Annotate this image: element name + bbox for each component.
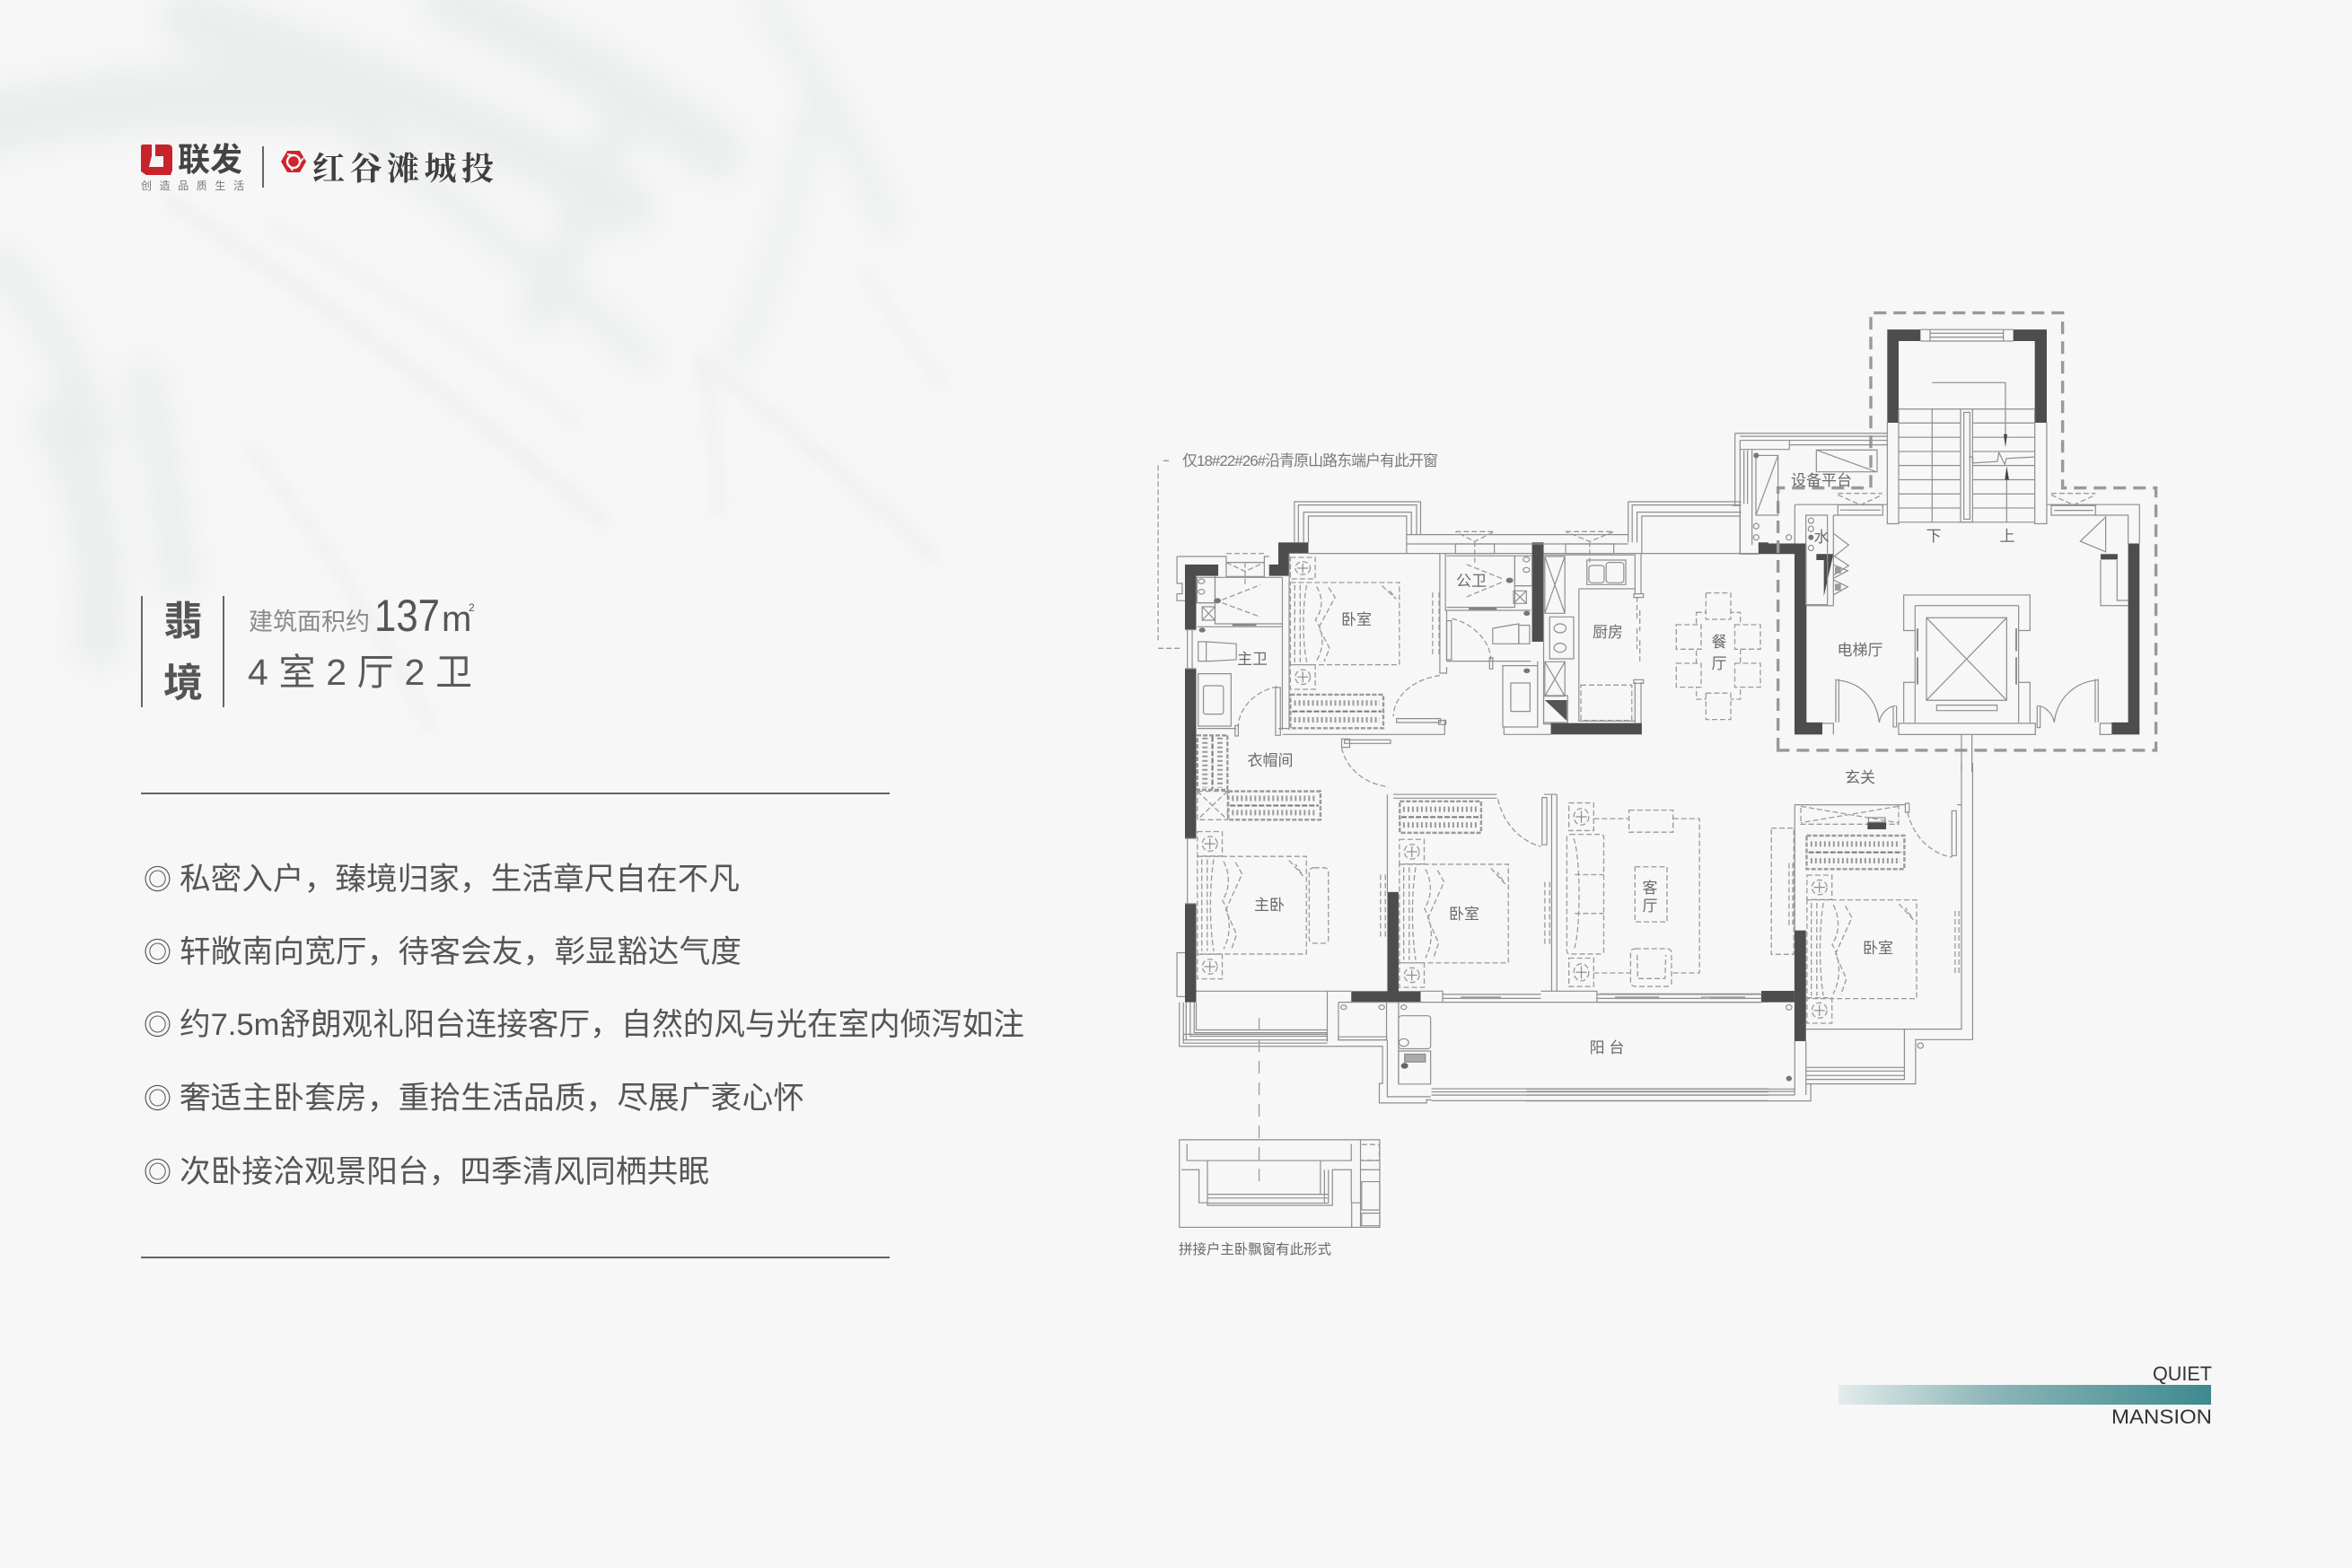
plan: north-west rooms: [1158, 460, 1768, 835]
room labels: 衣帽间: [1248, 752, 1293, 769]
feature 1: 私密入户，臻境归家，生活章尺自在不凡: [180, 863, 740, 897]
logo: Lianfa symbol: [141, 145, 172, 175]
brand mark: quiet mansion: [1839, 1362, 2212, 1428]
plan note: bay window: 拼接户主卧飘窗有此形式: [1179, 1241, 1331, 1257]
area unit superscript: 2: [469, 601, 475, 614]
room labels: 玄关: [1845, 769, 1875, 786]
room labels: 电梯厅: [1837, 642, 1883, 659]
feature 3: 约7.5m舒朗观礼阳台连接客厅，自然的风与光在室内倾泻如注: [180, 1008, 1024, 1042]
plan: south rooms: [1177, 763, 1768, 1227]
brand word: mansion: MANSION: [2111, 1406, 2212, 1428]
logo: tagline: 创造品质生活: [141, 180, 244, 192]
room labels: 卧室: [1863, 940, 1893, 957]
room labels: 上: [2000, 528, 2014, 545]
room labels: 主卫: [1237, 651, 1268, 668]
area unit: m: [442, 600, 471, 639]
heading: product name: 翡: [163, 600, 203, 644]
room labels: 主卧: [1254, 897, 1285, 914]
logo: Honggutan hexagon: [281, 151, 306, 172]
room labels: 下: [1926, 528, 1941, 545]
room labels: 卧室: [1449, 906, 1479, 923]
brand word: quiet: QUIET: [2153, 1362, 2212, 1385]
floor plan: [1158, 313, 2156, 1257]
room labels: 厨房: [1593, 624, 1623, 641]
room labels: 公卫: [1456, 573, 1487, 590]
heading block: [141, 591, 475, 707]
heading: product name: [163, 600, 203, 705]
logo: Lianfa wordmark: 联发: [178, 141, 242, 178]
room labels: 设备平台: [1791, 472, 1852, 489]
room labels: 阳 台: [1590, 1039, 1624, 1056]
logo group: [141, 141, 494, 192]
palm leaf shadow: [0, 0, 943, 727]
plan: east bedroom: [1526, 763, 1972, 1101]
heading rule right: [223, 596, 224, 707]
room labels: 厅: [1643, 898, 1657, 915]
top rule: [141, 793, 890, 794]
plan note: window: 仅18#22#26#沿青原山路东端户有此开窗: [1182, 452, 1438, 469]
heading rule left: [141, 596, 143, 707]
feature 5: ◎: [144, 1157, 171, 1188]
heading: product name: 境: [163, 661, 203, 705]
room labels: 餐: [1711, 634, 1727, 651]
feature 2: ◎: [144, 937, 171, 968]
gradient bar: [1839, 1385, 2211, 1405]
feature 2: 轩敞南向宽厅，待客会友，彰显豁达气度: [180, 935, 742, 969]
feature 4: ◎: [144, 1083, 171, 1115]
feature list: [144, 863, 1024, 1189]
feature 3: ◎: [144, 1010, 171, 1041]
logo: Honggutan wordmark: 红谷滩城投: [312, 144, 494, 189]
area label: 建筑面积约: [249, 609, 370, 635]
room labels: 卧室: [1341, 611, 1372, 628]
feature 4: 奢适主卧套房，重拾生活品质，尽展广袤心怀: [180, 1082, 804, 1116]
room layout: 4 室 2 厅 2 卫: [248, 652, 472, 693]
room labels: 客: [1643, 880, 1657, 897]
feature 1: ◎: [144, 864, 171, 896]
bottom rule: [141, 1257, 890, 1258]
logo divider: [262, 146, 264, 188]
room labels: [1237, 472, 2014, 1056]
room labels: 水: [1813, 529, 1830, 546]
plan: stair and elevator core: [1733, 313, 2156, 772]
room labels: 厅: [1711, 655, 1727, 672]
area value: 137: [374, 591, 440, 641]
feature 5: 次卧接洽观景阳台，四季清风同栖共眠: [180, 1155, 709, 1189]
